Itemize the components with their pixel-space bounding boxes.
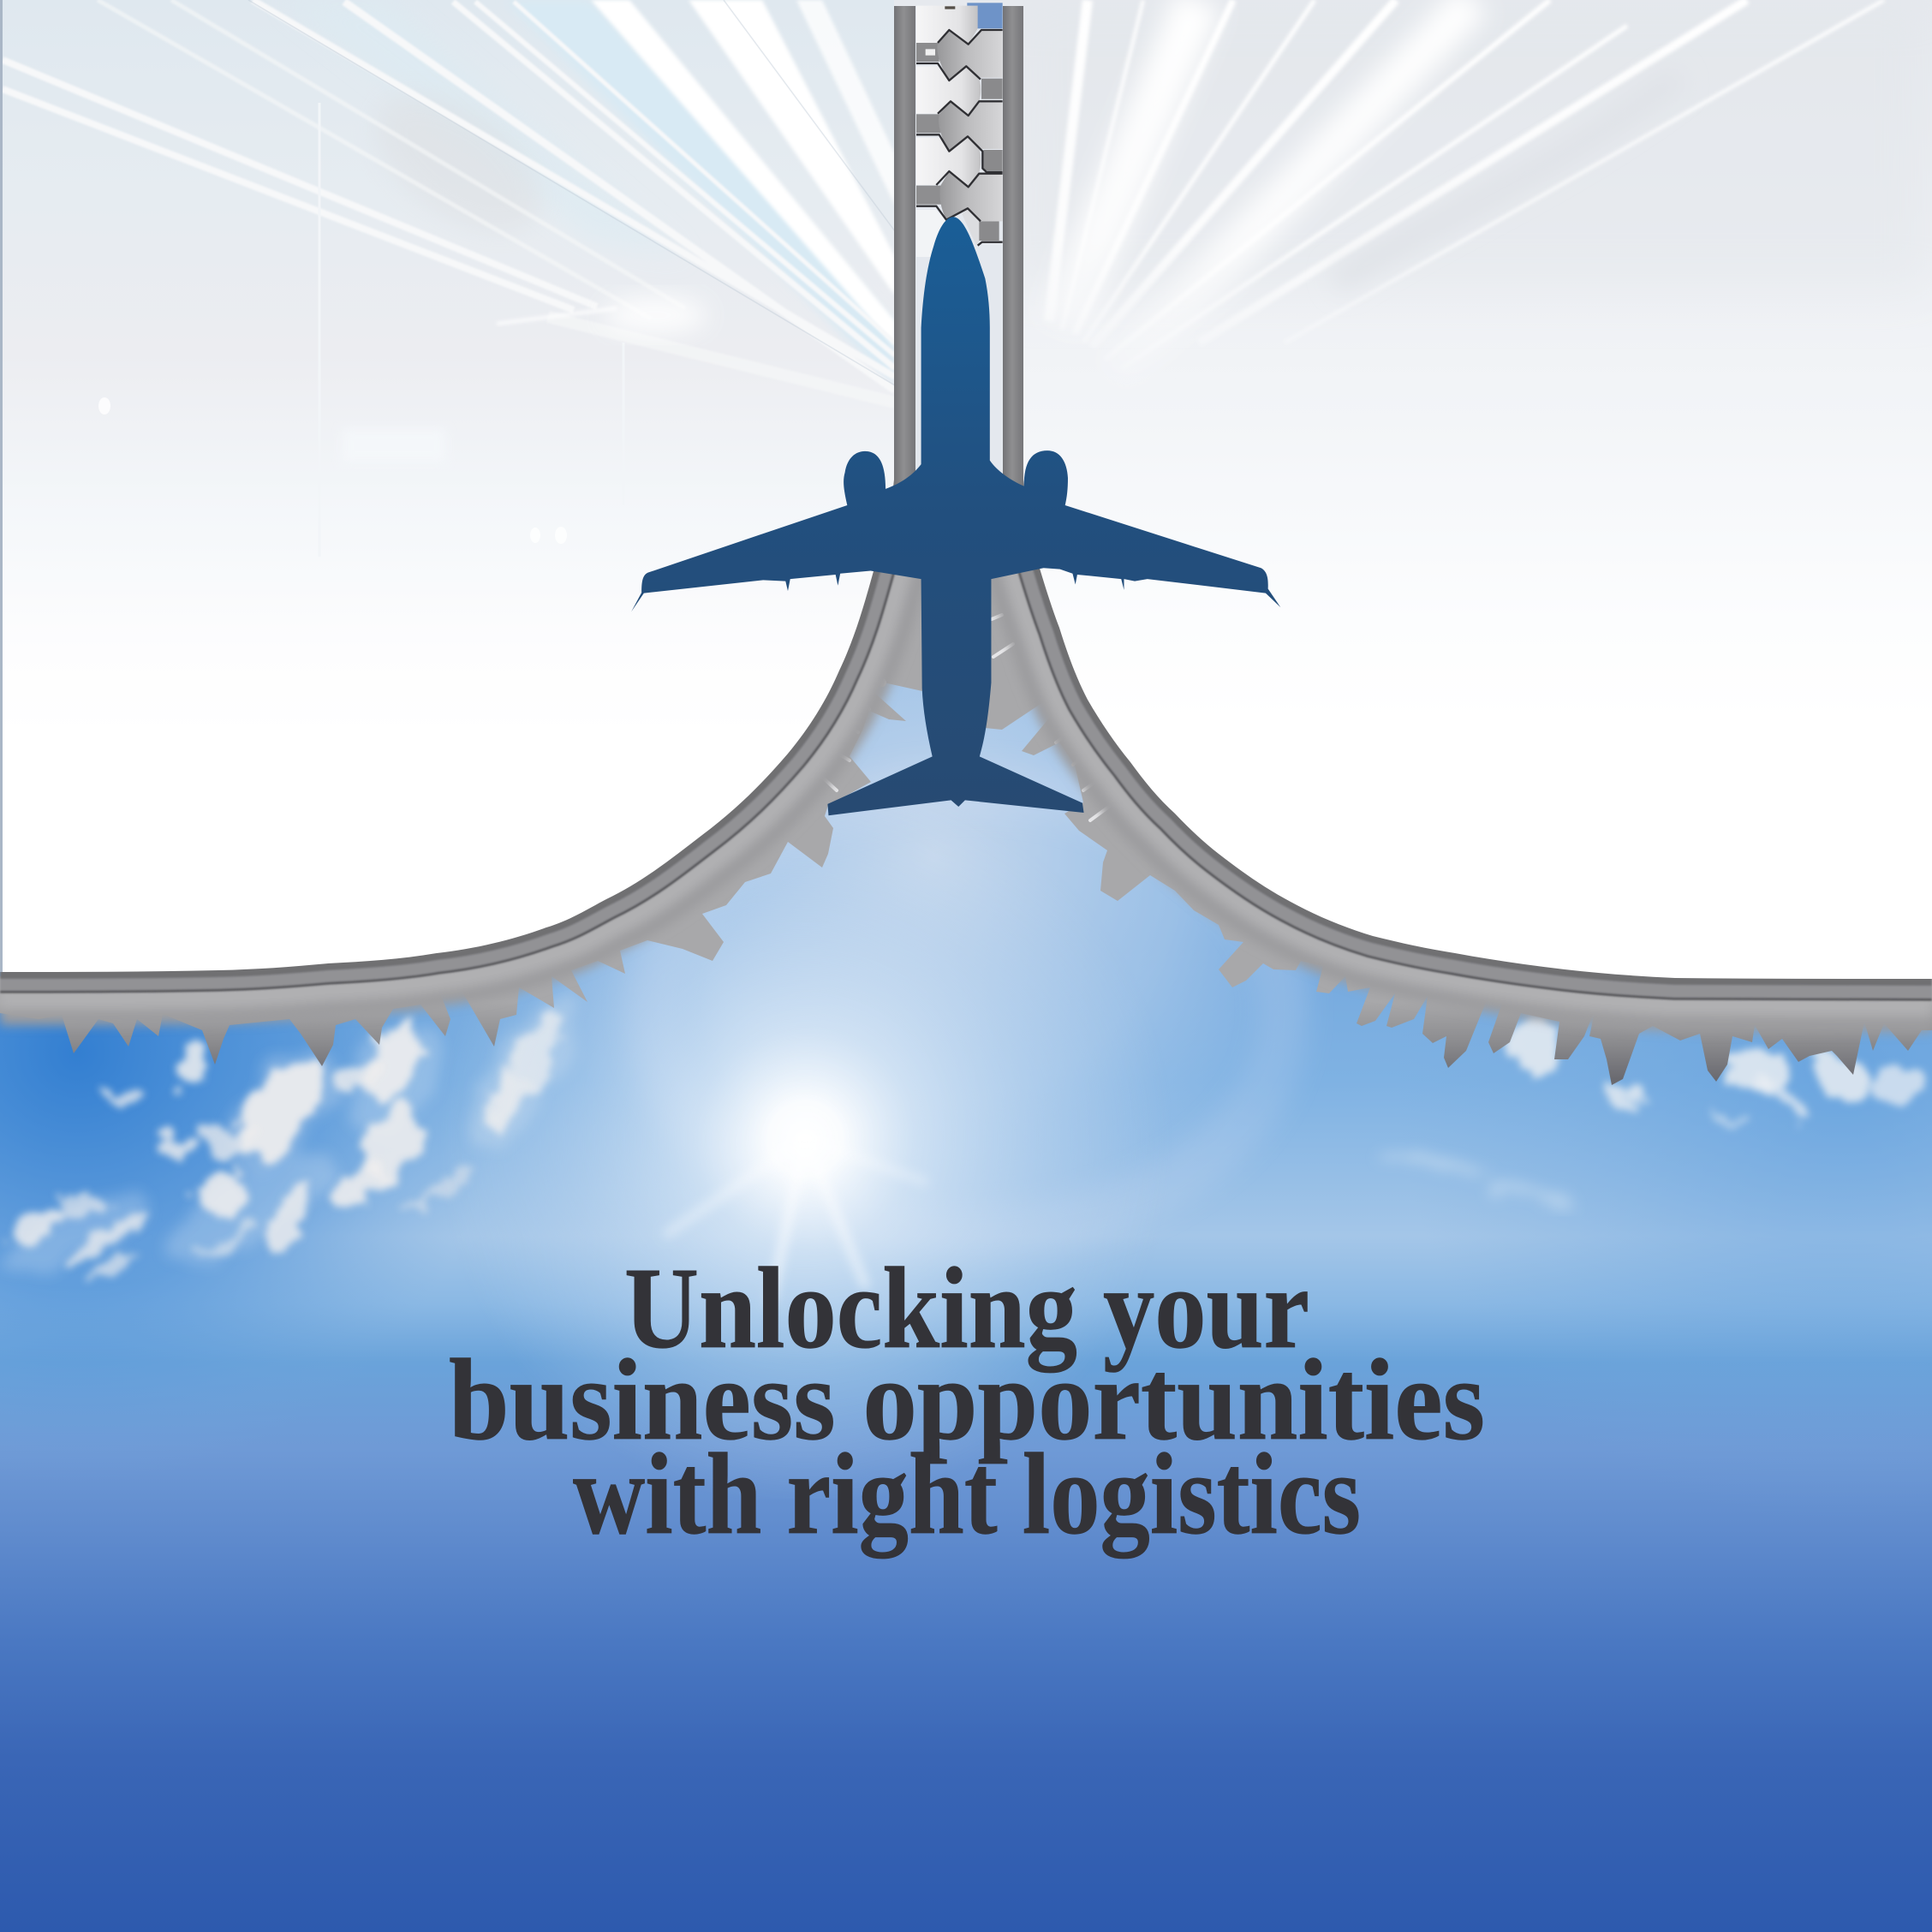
zipper rail left: [0, 6, 894, 972]
clouds right: [1379, 1007, 1923, 1200]
zipper vertical rail left: [894, 6, 915, 494]
clouds left: [0, 985, 597, 1286]
skyline highlights: [815, 615, 1119, 820]
title line 2: business opportunities: [449, 1336, 1485, 1464]
zipper vertical rail right: [1003, 6, 1023, 494]
skyline left: [0, 548, 922, 1066]
title: [449, 1244, 1485, 1559]
title line 1: Unlocking your: [624, 1244, 1309, 1373]
title line 3: with right logistics: [573, 1430, 1361, 1559]
upper right light panel: [1011, 0, 1932, 1002]
sun glow: [343, 728, 1285, 1499]
skyline right: [985, 548, 1932, 1085]
zipper rail right: [1023, 6, 1932, 979]
upper left light panel: [0, 0, 908, 985]
zipper teeth: [915, 3, 1004, 491]
top edge strip: [894, 0, 1023, 7]
airplane silhouette: [631, 217, 1280, 815]
